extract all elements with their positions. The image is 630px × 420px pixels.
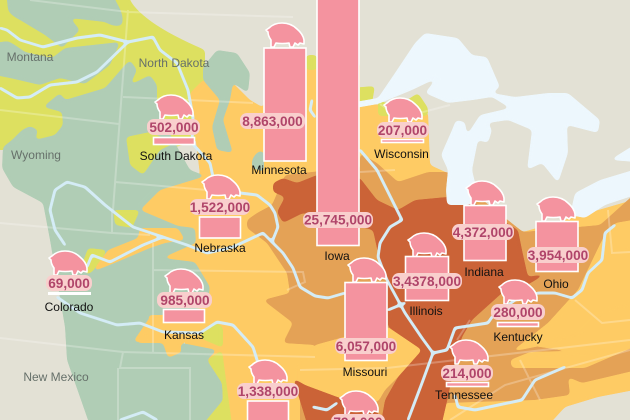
state: Ohio [527,197,589,291]
state: Tennessee: 214,000 [442,366,492,381]
state: Indiana: Indiana [464,265,504,279]
state: Kansas: Kansas [164,328,204,342]
state: Missouri: 6,057,000 [336,339,396,354]
state: Nebraska [190,175,250,255]
state: Tennessee: Tennessee [435,388,493,402]
state: Nebraska: Nebraska [194,241,246,255]
state: Colorado: 69,000 [48,276,90,291]
state: Kansas: 985,000 [160,293,210,308]
state: Missouri: Missouri [343,365,387,379]
state: Wisconsin: 207,000 [378,123,427,138]
state: Oklahoma: 1,338,000 [238,384,298,399]
state: Kentucky [491,280,545,344]
region label: Montana: Montana [7,50,54,64]
state: South Dakota [140,95,213,163]
state: Iowa: 25,745,000 [304,212,372,228]
state: Arkansas [331,391,385,420]
state: Illinois: 3,4378,000 [393,274,461,289]
state: Missouri [335,258,397,379]
state: Illinois [392,233,462,318]
state: Ohio: Ohio [543,277,569,291]
state: Nebraska: 1,522,000 [190,200,250,215]
state: Colorado: Colorado [45,300,94,314]
state: Indiana: 4,372,000 [453,225,513,240]
region label: Wyoming: Wyoming [11,148,61,162]
state: Colorado [45,251,94,314]
state: South Dakota: 502,000 [149,120,199,135]
state: Wisconsin: Wisconsin [374,147,429,161]
state: Illinois: Illinois [409,304,443,318]
state: Indiana [452,181,514,279]
state: Kansas [157,269,212,342]
state: Tennessee [435,340,493,402]
state: Minnesota [240,23,307,177]
state: Wisconsin [374,98,429,161]
state: Minnesota: Minnesota [251,163,307,177]
state: Iowa: Iowa [324,249,350,263]
state: Oklahoma [237,360,299,420]
region label: New Mexico: New Mexico [23,370,89,384]
state: South Dakota: South Dakota [140,149,213,163]
region label: North Dakota: North Dakota [139,56,210,70]
state: Ohio: 3,954,000 [528,248,588,263]
state: Kentucky: 280,000 [493,305,543,320]
state: Iowa [303,0,373,263]
state: Kentucky: Kentucky [493,330,543,344]
state: Minnesota: 8,863,000 [242,114,303,129]
